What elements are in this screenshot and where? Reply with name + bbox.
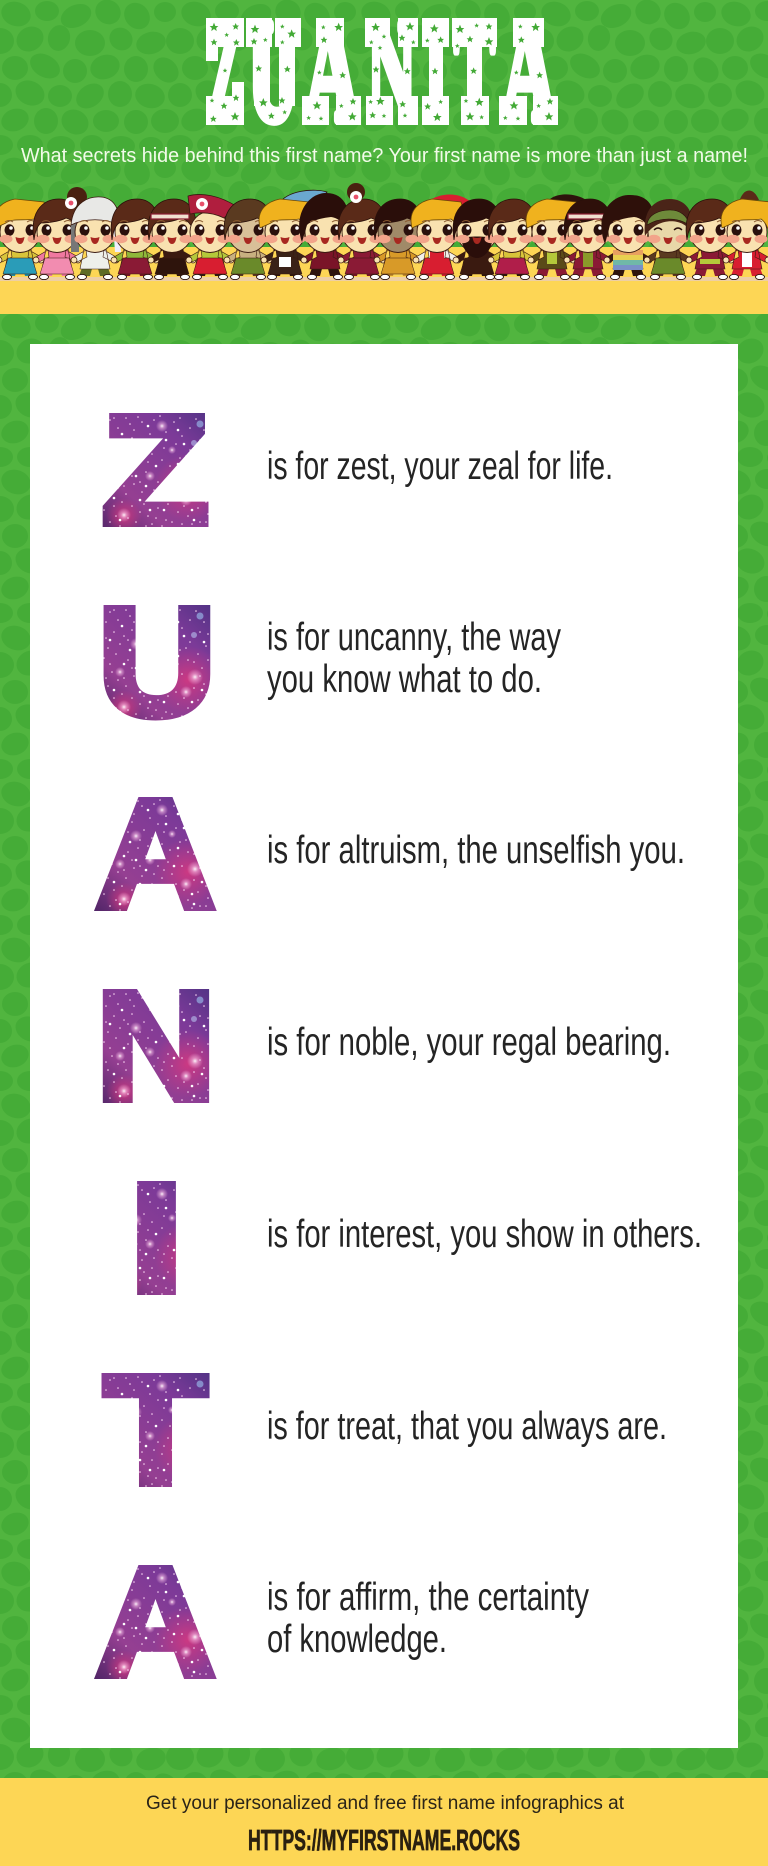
line for Z: is for zest, your zeal for life. [267,445,613,488]
character 20: blonde, red and white outfit [721,190,768,280]
lines for A [267,1576,589,1661]
lines for U: is for uncanny, the way [267,616,561,659]
character 7: tan skin, grass skirt [224,199,274,280]
character 1: blonde in teal overalls [0,199,46,280]
character 3: white headdress [71,197,121,280]
character 4: green top, maroon skirt [111,199,159,280]
footer url: HTTPS://MYFIRSTNAME.ROCKS [248,1825,520,1857]
title: ZUANITA with star cut-outs [206,0,558,152]
galaxy letter T: T [104,1344,207,1516]
character 15: blonde, olive top, maroon legs [526,194,586,280]
character 10: brown hair with flower, maroon [338,183,386,280]
character 9: tall black hair, maroon suit [299,193,349,280]
row T [104,1344,667,1516]
yellow band behind characters [0,247,768,314]
galaxy letter Z: Z [102,384,209,556]
character 5: black outfit with headband [148,199,196,280]
row A second [96,1536,589,1708]
galaxy letter A: A [96,768,215,940]
footer band [0,1778,768,1866]
character 18: green cap, grass skirt, closed eyes [644,199,692,280]
galaxy letter A: A [96,1536,215,1708]
row I [129,1152,702,1324]
character 8: blonde with blue cap and apron [259,190,327,280]
lines for A: of knowledge. [267,1618,447,1661]
character 13: black hair, beard, dark robe [453,199,501,280]
character 6: red hat, red skirt [186,194,236,280]
character 14: polka skirt [488,199,536,280]
illustration: row of children holding hands [0,183,768,280]
row U [98,576,561,748]
character 16: dark hair headband, maroon robe [564,199,612,280]
character 17: big dark hair, rainbow shirt [601,195,654,280]
character 19: brown hair, maroon [686,199,734,280]
lines for U: you know what to do. [267,658,542,701]
galaxy letter I: I [129,1152,184,1324]
subtitle: What secrets hide behind this first name? Your first name is more than just a name! [21,145,748,167]
character 2: pink kimono with flower [33,187,87,280]
row Z [102,384,613,556]
galaxy letter N: N [96,960,216,1132]
character 11: dark skin, orange wrap [374,199,422,280]
row N [96,960,671,1132]
panel: white content card [30,344,738,1748]
footer text: Get your personalized and free first name infographics at [146,1793,625,1814]
character 12: blonde with red hat and dress [411,194,471,280]
row A [96,768,685,940]
lines for A: is for affirm, the certainty [267,1576,589,1619]
lines for U [267,616,561,701]
galaxy letter U: U [98,576,216,748]
